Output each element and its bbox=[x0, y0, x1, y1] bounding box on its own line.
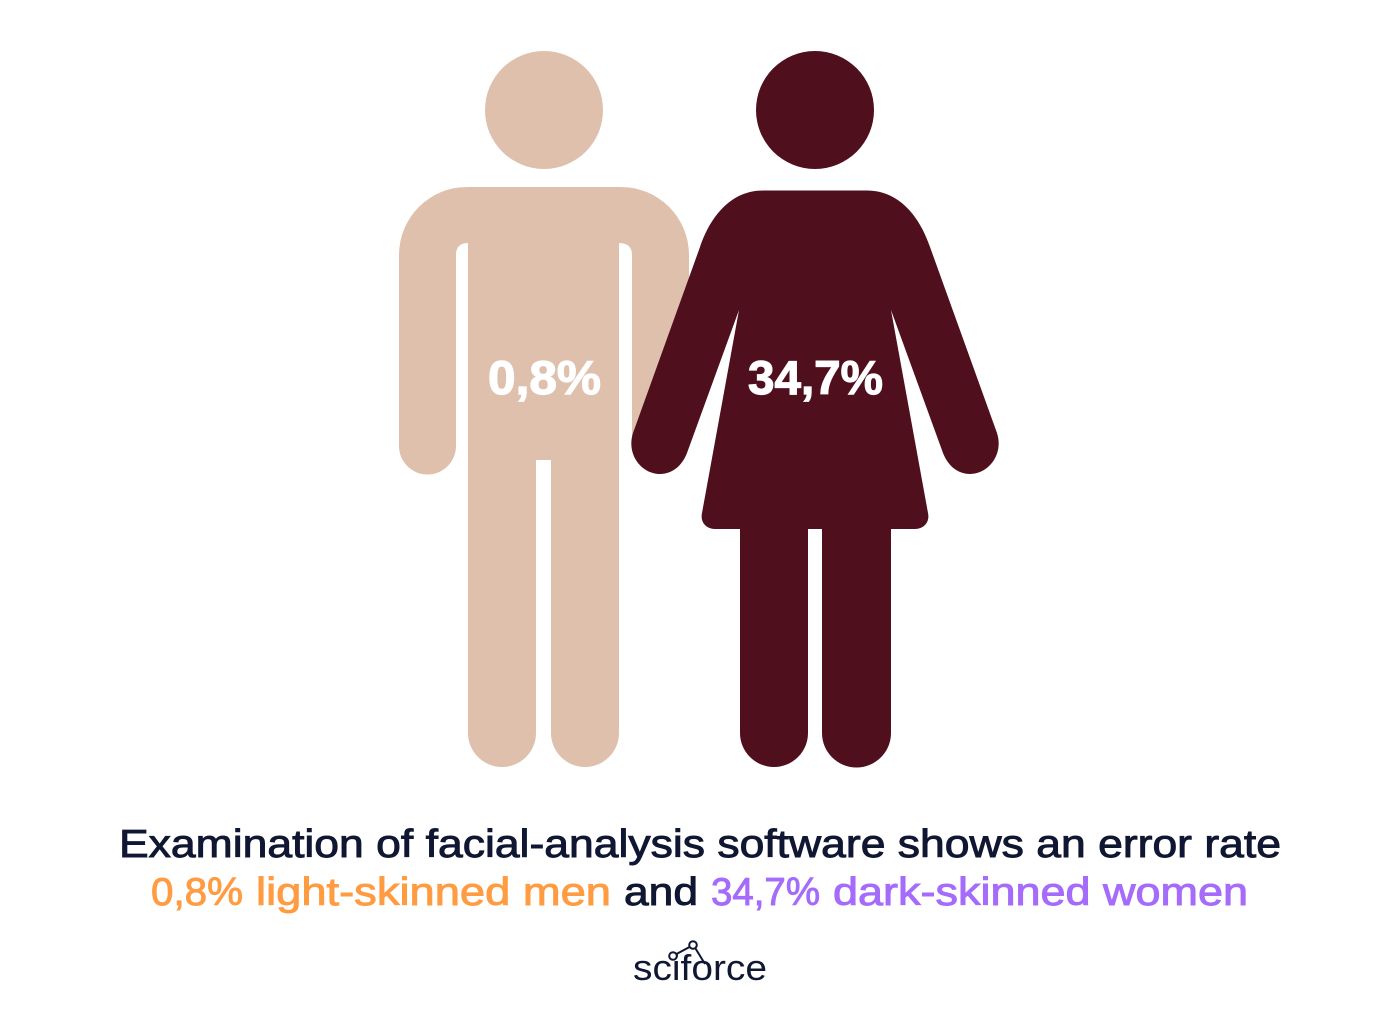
caption line 2: light-skinned men bbox=[151, 871, 611, 914]
caption line 2: light-skinned men: 0,8% bbox=[151, 871, 243, 914]
figure: light-skinned man bbox=[399, 51, 689, 767]
figure: dark-skinned woman bbox=[631, 51, 999, 768]
caption line 2: light-skinned men: light-skinned men bbox=[256, 871, 611, 914]
caption bbox=[119, 823, 1281, 914]
caption line 2: and: and bbox=[624, 871, 698, 914]
man body bbox=[399, 187, 689, 767]
caption line 2: dark-skinned women bbox=[711, 871, 1248, 914]
logo: sciforce bbox=[633, 941, 767, 988]
woman body bbox=[631, 190, 999, 768]
logo wordmark: sciforce bbox=[633, 947, 767, 988]
caption line 1: Examination of facial-analysis software shows an error rate bbox=[119, 823, 1281, 866]
woman head bbox=[756, 51, 874, 169]
man head bbox=[485, 51, 603, 169]
man percentage label: 0,8% bbox=[488, 351, 601, 404]
woman percentage label: 34,7% bbox=[748, 351, 883, 404]
caption line 2: dark-skinned women: 34,7% bbox=[711, 871, 820, 914]
logo network icon bbox=[669, 941, 705, 964]
caption line 2: dark-skinned women: dark-skinned women bbox=[833, 871, 1248, 914]
